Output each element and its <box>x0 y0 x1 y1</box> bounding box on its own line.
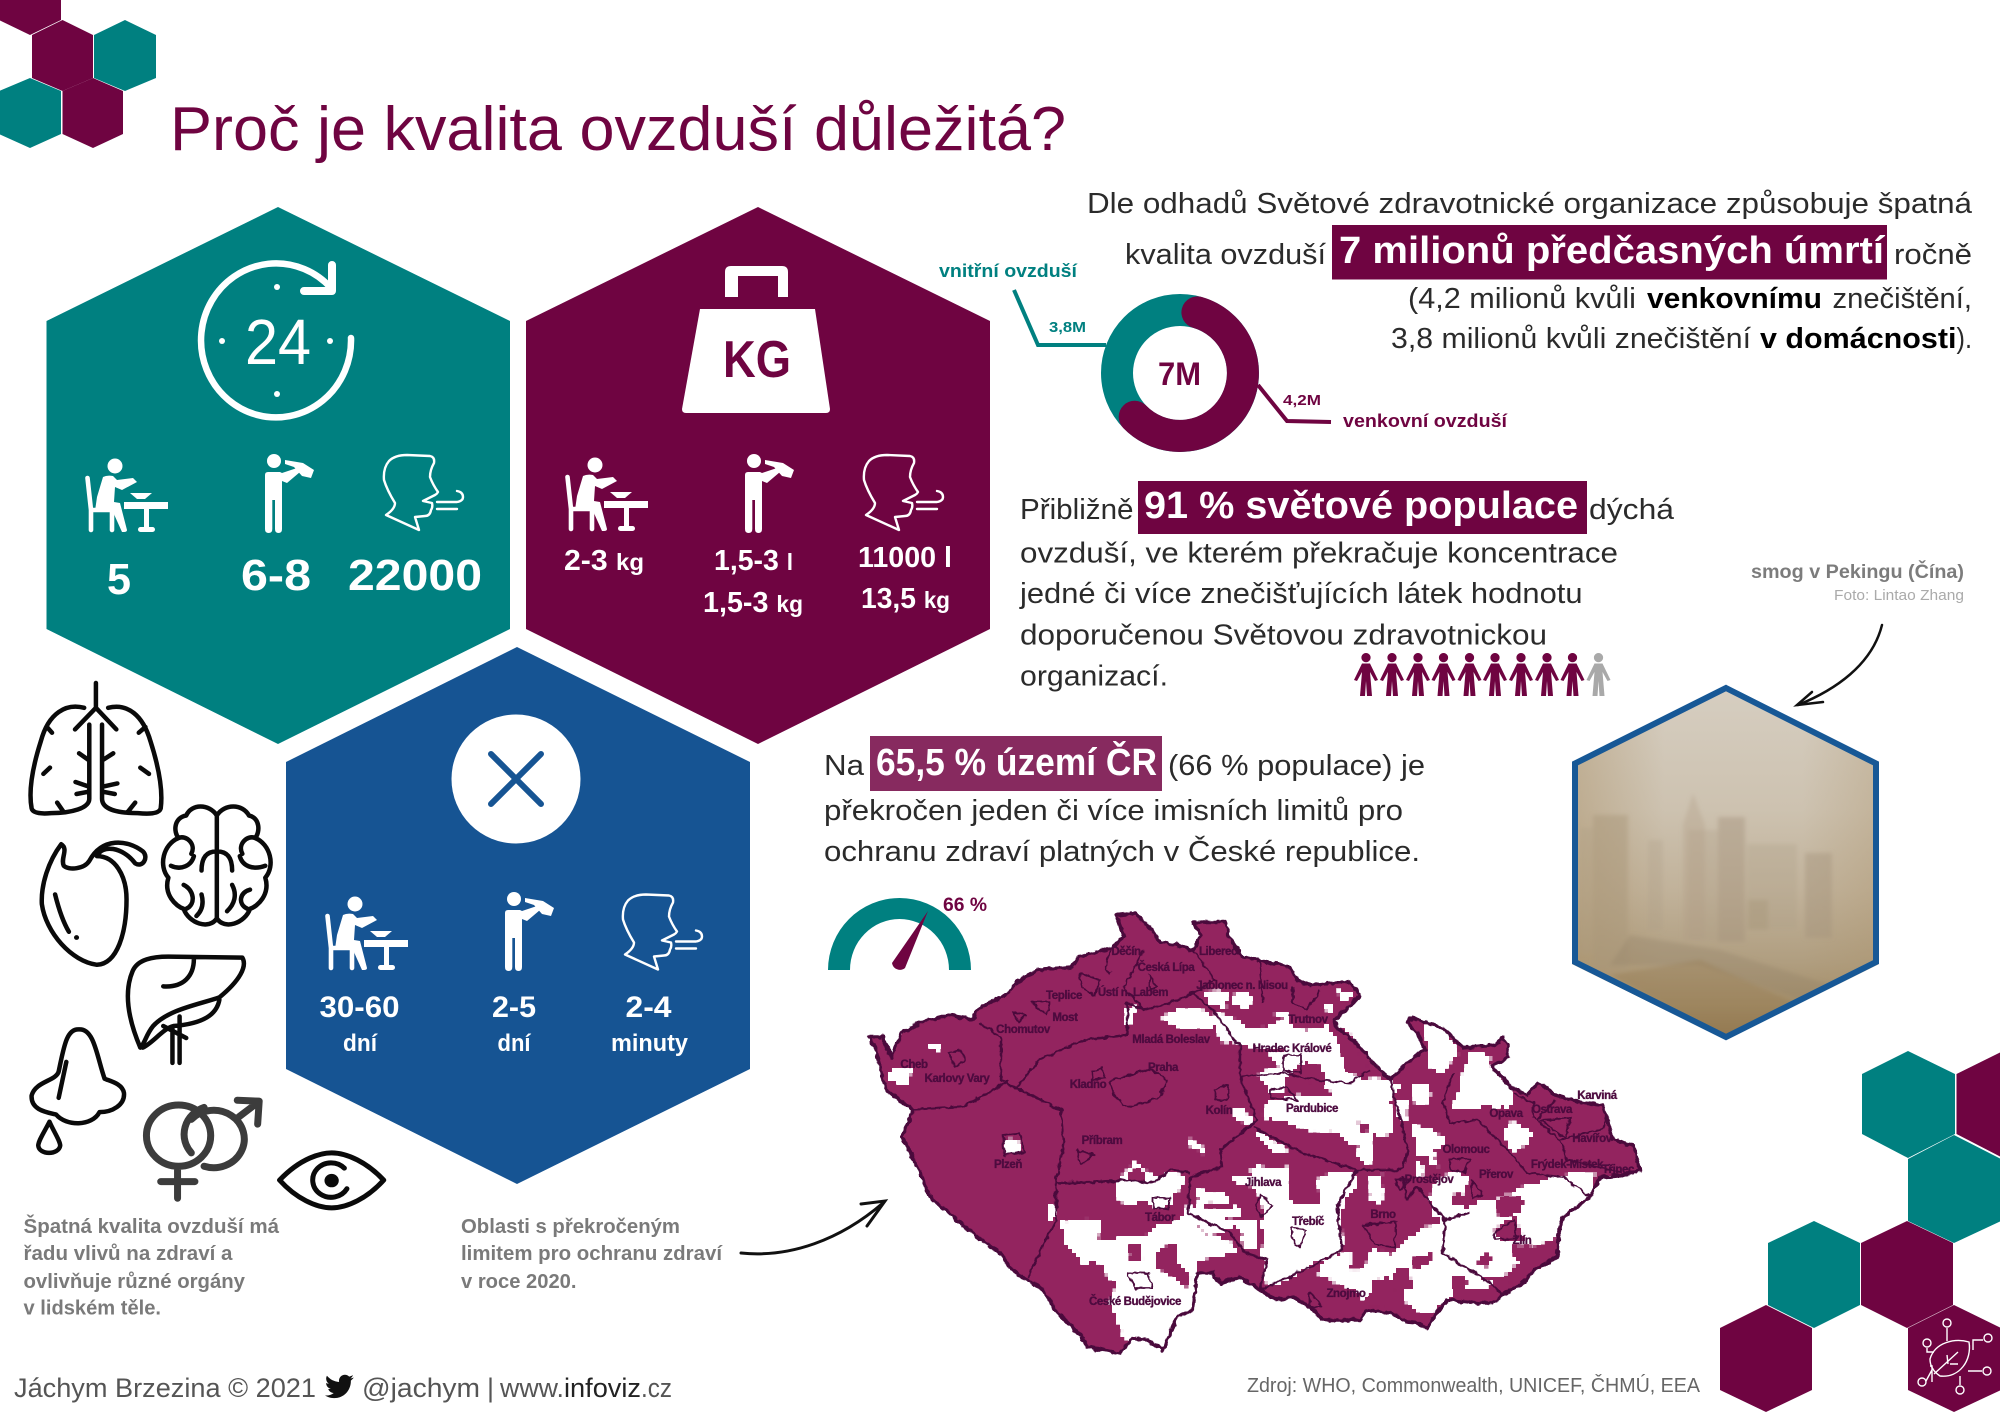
map city labels: Havířov <box>1572 1133 1613 1145</box>
map city labels: Česká Lípa <box>1138 961 1195 974</box>
icon: breathing head <box>384 455 463 530</box>
map city labels: Znojmo <box>1326 1288 1366 1300</box>
icon: lungs <box>30 683 161 814</box>
map city labels: Příbram <box>1082 1135 1123 1147</box>
value: water: 6-8 <box>241 551 311 600</box>
icon: liver <box>128 957 244 1063</box>
text: map caption: limitem pro ochranu zdraví <box>461 1243 723 1265</box>
map city labels: Ústí n. Labem <box>1098 986 1168 999</box>
chart: 7M donut: 7M <box>1158 356 1201 392</box>
icon: gender symbols <box>146 1100 259 1198</box>
text: Czech Republic limits: překročen jeden či více imisních limitů pro <box>824 795 1403 827</box>
chart: 7M donut <box>939 261 1508 436</box>
text: WHO estimate: 3,8 milionů kvůli znečištění <box>1391 323 1751 355</box>
text: 91 percent of population: organizací. <box>1020 660 1168 692</box>
text: 91 percent of population <box>1019 481 1675 692</box>
footer: author: Jáchym Brzezina © 2021 <box>14 1373 316 1403</box>
icon: 24 hour clock <box>201 263 351 417</box>
text: WHO estimate: znečištění, <box>1832 283 1972 315</box>
icon: eating person <box>88 458 168 532</box>
map city labels: Prostějov <box>1405 1174 1454 1186</box>
map city labels: Přerov <box>1479 1169 1514 1181</box>
map city labels: Jihlava <box>1245 1177 1282 1189</box>
value: food days <box>320 991 400 1057</box>
label: outdoor air: venkovní ovzduší <box>1343 411 1508 431</box>
footer: author: .cz <box>641 1373 672 1403</box>
value: air minutes: 2-4 <box>626 991 672 1024</box>
highlight: 7 million deaths: 7 milionů předčasných úmrtí <box>1339 230 1886 272</box>
icon: breathing head <box>864 455 943 530</box>
highlight: 65.5 percent of territory: 65,5 % území ČR <box>876 739 1157 784</box>
map city labels: Cheb <box>900 1059 928 1071</box>
icon: cross in circle <box>452 714 580 844</box>
label: outdoor value: 4,2M <box>1283 392 1321 409</box>
map city labels: Brno <box>1370 1209 1396 1221</box>
icon: drinking person <box>505 892 554 971</box>
decorative hexagons bottom right <box>1720 1051 2000 1412</box>
photo: smog in Beijing <box>1572 685 1879 1040</box>
value: food: 2-3 kg <box>564 545 644 577</box>
map city labels: Jablonec n. Nisou <box>1196 980 1288 992</box>
value: water litres: 1,5-3 l <box>714 545 793 577</box>
label: indoor air: vnitřní ovzduší <box>939 261 1078 281</box>
icon: drinking person <box>265 454 314 533</box>
text: map caption: v roce 2020. <box>461 1271 576 1293</box>
icon: ten people, nine highlighted <box>1354 653 1610 696</box>
value: water kilograms: 1,5-3 kg <box>703 587 803 619</box>
map city labels: Mladá Boleslav <box>1132 1034 1211 1046</box>
icon: heart <box>42 843 145 965</box>
decorative hexagons top left <box>0 0 156 148</box>
value: water days: dní <box>498 1030 532 1057</box>
value: air kilograms: 13,5 kg <box>861 583 950 615</box>
icon: kilogram weight <box>682 266 830 413</box>
map city labels: Zlín <box>1513 1235 1532 1247</box>
text: WHO estimate: (4,2 milionů kvůli <box>1408 283 1636 315</box>
map: Czech Republic exceedance areas <box>869 913 1640 1353</box>
text: Czech Republic limits: ochranu zdraví platných v České republice. <box>824 834 1420 868</box>
icon: eating person <box>568 458 648 531</box>
map city labels: Most <box>1052 1012 1078 1024</box>
footer: author <box>14 1373 672 1403</box>
panel: purple hexagon weight <box>526 207 990 744</box>
map city labels: Karlovy Vary <box>925 1073 990 1085</box>
text: 91 percent of population: ovzduší, ve kterém překračuje koncentrace <box>1020 538 1618 570</box>
text: map caption <box>461 1216 723 1293</box>
icon: 24 hour clock: 24 <box>245 306 311 378</box>
map city labels <box>900 946 1635 1308</box>
value: food: 5 <box>107 555 131 604</box>
map city labels: České Budějovice <box>1089 1295 1181 1308</box>
caption: Beijing smog photo <box>1751 561 1964 604</box>
map patches over limit <box>1128 1027 1555 1307</box>
icon: leaf circuit <box>1918 1319 1992 1394</box>
icon: breathing head <box>623 894 702 970</box>
text: health impact caption: ovlivňuje různé orgány <box>24 1271 246 1293</box>
caption: Beijing smog photo: Foto: Lintao Zhang <box>1834 587 1964 604</box>
map city labels: Kolín <box>1206 1105 1233 1117</box>
value: water days <box>492 991 536 1057</box>
footer: author: @jachym <box>362 1373 480 1403</box>
text: WHO estimate: Dle odhadů Světové zdravotnické organizace způsobuje špatná <box>1087 188 1973 220</box>
value: air: 22000 <box>348 551 482 600</box>
map city labels: Olomouc <box>1442 1144 1491 1156</box>
leader: indoor air <box>1014 290 1106 345</box>
text: health impact caption <box>24 1214 280 1320</box>
map city labels: Trutnov <box>1288 1014 1329 1026</box>
icon: drinking person <box>745 454 794 533</box>
map city labels: Praha <box>1148 1062 1179 1074</box>
panel: teal hexagon 24 hours <box>46 207 510 744</box>
icon: nose <box>32 1029 124 1153</box>
chart: 66 percent gauge <box>828 895 987 970</box>
text: 91 percent of population: jedné či více znečišťujících látek hodnotu <box>1019 578 1582 610</box>
text: health impact caption: Špatná kvalita ovzduší má <box>24 1214 280 1238</box>
value: air minutes <box>611 991 689 1057</box>
map city labels: Děčín <box>1111 946 1141 958</box>
footer: author: www. <box>499 1373 564 1403</box>
value: air litres: 11000 l <box>858 542 952 574</box>
map city labels: Ostrava <box>1532 1104 1573 1116</box>
icon: eating person <box>328 896 408 970</box>
text: map caption: Oblasti s překročeným <box>461 1216 680 1238</box>
map city labels: Pardubice <box>1286 1103 1338 1115</box>
map city labels: Frýdek-Místek <box>1531 1159 1604 1171</box>
text: WHO estimate: kvalita ovzduší <box>1125 239 1326 271</box>
icons: affected organs <box>30 683 384 1208</box>
value: food days: 30-60 <box>320 991 400 1024</box>
icon: kilogram weight: KG <box>723 331 791 389</box>
text: health impact caption: řadu vlivů na zdraví a <box>24 1243 233 1265</box>
map city labels: Kladno <box>1070 1079 1107 1091</box>
map city labels: Tábor <box>1145 1212 1176 1224</box>
text: WHO estimate <box>1087 188 1973 355</box>
text: 91 percent of population: dýchá <box>1589 494 1675 526</box>
text: 91 percent of population: doporučenou Světovou zdravotnickou <box>1020 620 1547 652</box>
text: Czech Republic limits <box>824 736 1425 868</box>
arrow: caption to map <box>741 1201 885 1254</box>
white areas below limit <box>890 990 1593 1350</box>
highlight: 91 percent: 91 % světové populace <box>1144 485 1578 527</box>
chart: 66 percent gauge: 66 % <box>943 895 987 916</box>
footer: sources: Zdroj: WHO, Commonwealth, UNICEF, ČHMÚ, EEA <box>1247 1374 1701 1397</box>
icon: eye <box>280 1153 384 1208</box>
title: Proč je kvalita ovzduší důležitá? <box>170 95 1066 164</box>
text: WHO estimate: venkovnímu <box>1647 283 1822 315</box>
leader: outdoor air <box>1258 385 1331 422</box>
footer: author: | <box>487 1373 494 1403</box>
map city labels: Plzeň <box>994 1159 1022 1171</box>
map city labels: Třebíč <box>1292 1216 1325 1228</box>
map city labels: Chomutov <box>996 1024 1051 1036</box>
map city labels: Opava <box>1489 1108 1524 1120</box>
text: health impact caption: v lidském těle. <box>24 1298 161 1320</box>
value: air minutes: minuty <box>611 1030 689 1057</box>
text: WHO estimate: v domácnosti <box>1760 323 1956 355</box>
text: Czech Republic limits: (66 % populace) je <box>1168 750 1425 782</box>
text: WHO estimate: ). <box>1956 323 1972 355</box>
arrow: caption to photo <box>1797 625 1882 705</box>
caption: Beijing smog photo: smog v Pekingu (Čína) <box>1751 561 1964 583</box>
text: 91 percent of population: Přibližně <box>1020 494 1134 526</box>
map city labels: Třinec <box>1602 1164 1635 1176</box>
map city labels: Hradec Králové <box>1253 1043 1331 1055</box>
footer: author: infoviz <box>564 1373 641 1403</box>
text: WHO estimate: ročně <box>1894 239 1972 271</box>
value: water days: 2-5 <box>492 991 536 1024</box>
map city labels: Liberec <box>1199 946 1238 958</box>
icon: twitter bird <box>325 1375 354 1398</box>
text: Czech Republic limits: Na <box>824 750 865 782</box>
map city labels: Karviná <box>1577 1090 1618 1102</box>
district and national borders <box>869 913 1640 1353</box>
value: food days: dní <box>343 1030 378 1057</box>
label: indoor value: 3,8M <box>1049 319 1086 336</box>
map city labels: Teplice <box>1046 990 1082 1002</box>
map fill <box>869 913 1640 1353</box>
icon: brain <box>163 807 271 924</box>
panel: blue hexagon survival <box>286 647 750 1184</box>
